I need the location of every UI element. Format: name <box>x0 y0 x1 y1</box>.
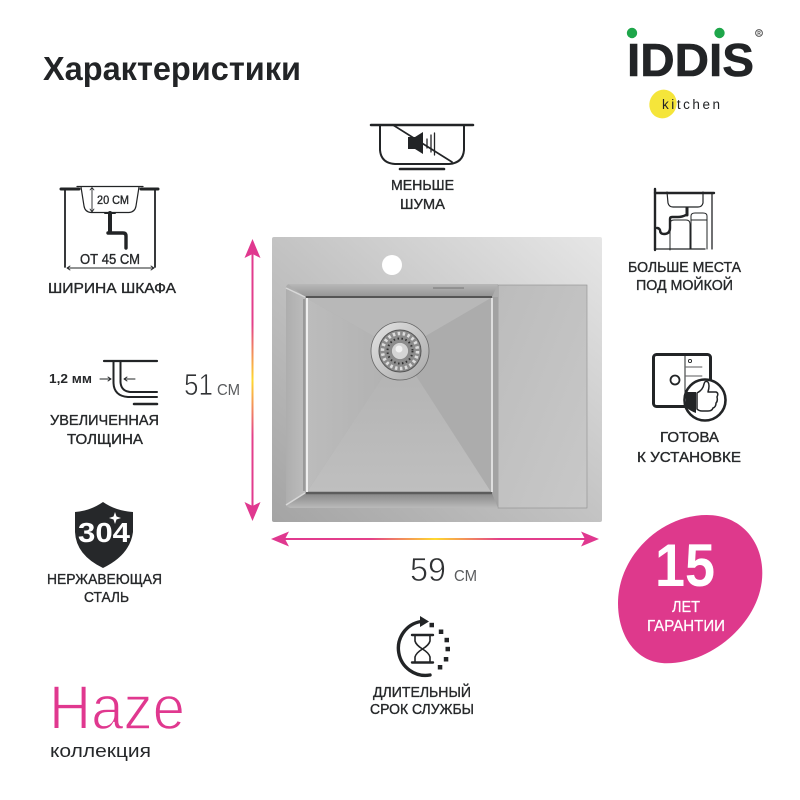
bowl <box>286 284 498 508</box>
title: Характеристики <box>43 50 301 87</box>
arrow: width <box>271 532 599 546</box>
icon: 304 shield <box>75 502 133 568</box>
icon: cabinet width: 20 СМ <box>97 193 129 207</box>
label: less noise: МЕНЬШЕ <box>391 178 454 194</box>
warranty badge: 15 <box>655 532 715 599</box>
dimension: 59 cm: СМ <box>454 568 477 585</box>
dimension: 51 cm: СМ <box>217 382 240 399</box>
label: ready to install: ГОТОВА <box>660 430 719 446</box>
sink photo <box>272 237 602 522</box>
label: ready to install: К УСТАНОВКЕ <box>637 450 741 466</box>
icon: less noise <box>371 125 473 169</box>
collection name: Haze <box>49 674 185 743</box>
logo: IDDIS kitchen: IDDIS <box>627 34 754 86</box>
label: cabinet width: ШИРИНА ШКАФА <box>48 281 176 297</box>
drain strainer <box>371 322 429 380</box>
dimension: 51 cm <box>184 367 240 402</box>
logo: IDDIS kitchen <box>627 28 762 123</box>
collection caption: коллекция <box>50 741 151 761</box>
logo: IDDIS kitchen: kitchen <box>662 97 720 112</box>
drainboard <box>498 285 587 508</box>
icon: increased thickness: 1,2 мм <box>49 371 92 386</box>
warranty badge: ЛЕТ <box>672 599 700 616</box>
dimension: 59 cm: 59 <box>410 551 446 588</box>
icon: more space under sink <box>655 189 714 250</box>
label: stainless steel: СТАЛЬ <box>84 590 129 606</box>
dimension: 59 cm <box>410 551 477 588</box>
warranty badge <box>618 515 762 663</box>
label: more space under sink: ПОД МОЙКОЙ <box>636 276 733 294</box>
warranty badge: ГАРАНТИИ <box>647 618 725 635</box>
label: more space under sink: БОЛЬШЕ МЕСТА <box>628 260 741 276</box>
icon: ready to install <box>654 354 726 420</box>
label: increased thickness: ТОЛЩИНА <box>67 432 143 448</box>
label: less noise: ШУМА <box>400 197 445 213</box>
icon: 304 shield: 304 <box>78 517 130 548</box>
icon: long service life <box>398 616 450 675</box>
label: long service life: ДЛИТЕЛЬНЫЙ <box>373 683 471 701</box>
label: stainless steel: НЕРЖАВЕЮЩАЯ <box>47 572 162 588</box>
arrow: height <box>244 239 260 521</box>
label: increased thickness: УВЕЛИЧЕННАЯ <box>50 413 159 429</box>
icon: increased thickness <box>49 361 157 404</box>
icon: cabinet width: ОТ 45 СМ <box>80 252 140 268</box>
logo: IDDIS kitchen: R <box>757 31 761 37</box>
dimension: 51 cm: 51 <box>184 367 213 402</box>
label: long service life: СРОК СЛУЖБЫ <box>370 702 474 718</box>
icon: cabinet width <box>61 186 158 270</box>
